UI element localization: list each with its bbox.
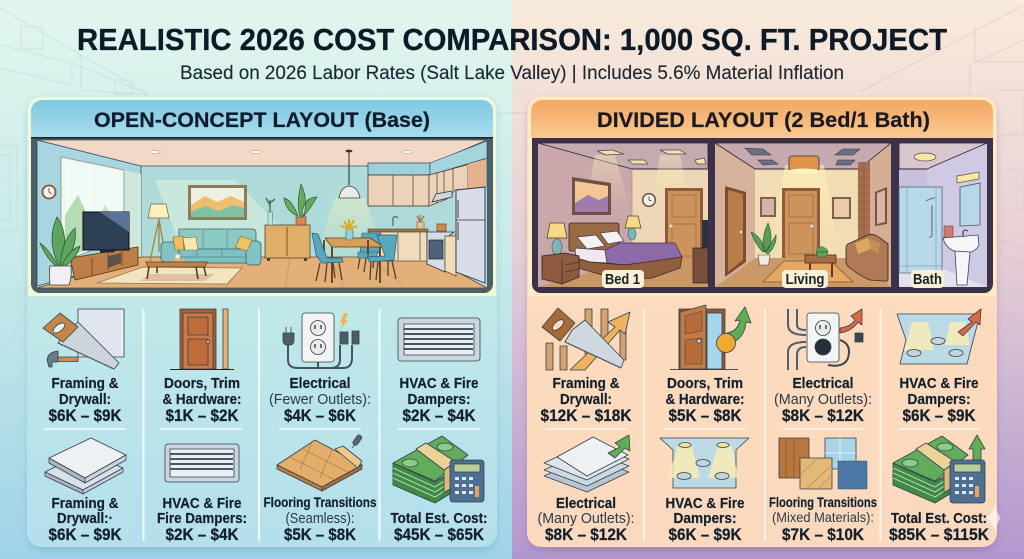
- living sofa: [846, 234, 888, 281]
- living plant: [751, 223, 776, 254]
- cost cell: framing and drywall: Drywall:: [59, 391, 111, 408]
- panel header: divided: DIVIDED LAYOUT (2 Bed/1 Bath): [597, 108, 930, 132]
- bed: [569, 223, 619, 251]
- icon: vent grille small: [165, 444, 239, 482]
- living pictures: [760, 197, 776, 217]
- cost cell: hvac and fire dampers, divided: Dampers:: [908, 391, 970, 408]
- living rug: [763, 261, 853, 282]
- cost cell: electrical many outlets: $8K – $12K: [782, 406, 865, 425]
- range hood: [432, 191, 452, 202]
- room: living: [715, 143, 891, 288]
- cost cell: doors, trim and hardware, divided: [666, 305, 751, 425]
- rug: [97, 267, 242, 284]
- cost cell: framing and drywall: [43, 309, 124, 425]
- cost cell: hvac and fire dampers, divided: HVAC & Fire: [900, 375, 978, 392]
- icon: money stack and calculator: [393, 436, 484, 503]
- sofa: [179, 229, 256, 250]
- bedroom clock: [642, 193, 656, 207]
- cost cell: electrical many outlets, second row: [538, 435, 634, 544]
- tv stand: [70, 247, 138, 280]
- icon: material swatches: [779, 438, 867, 489]
- cost cell: total estimated cost, open-concept: Total Est. Cost:: [390, 510, 488, 527]
- cost cell: flooring transitions mixed materials: Flooring Transitions: [769, 494, 877, 510]
- cost cell: framing and drywall: Framing &: [52, 375, 119, 392]
- illustration: open-concept living room and kitchen: [31, 137, 493, 293]
- cost cell: hvac and fire dampers, divided: [897, 309, 981, 425]
- cost cell: electrical many outlets, second row: $8K – $12K: [545, 525, 628, 544]
- cost cell: flooring transitions mixed materials: (Mixed Materials):: [772, 509, 874, 525]
- bedside lamps: [547, 223, 567, 238]
- wall picture: [188, 185, 247, 220]
- cost cell: total estimated cost, divided: [889, 435, 990, 544]
- background: left half: [0, 0, 512, 559]
- panel header: open-concept: OPEN-CONCEPT LAYOUT (Base): [94, 108, 430, 132]
- nightstand: [542, 253, 579, 284]
- cost cell: doors, trim and hardware: & Hardware:: [162, 391, 242, 408]
- cost cell: hvac and fire dampers, divided second row: [660, 438, 749, 544]
- cost cell: hvac and fire dampers, divided: $6K – $9K: [902, 406, 976, 425]
- icon: sparkle watermark: [985, 504, 1001, 532]
- sideboard: [265, 225, 310, 258]
- stove: [427, 232, 454, 272]
- left wall: [37, 140, 141, 286]
- living table: [805, 255, 836, 263]
- cost cell: framing and drywall, second row: Drywall:·: [57, 510, 113, 527]
- icon: saw, drywall and hammer: [43, 309, 124, 369]
- cost cell: total estimated cost, divided: Total Est. Cost:: [891, 510, 987, 527]
- panel header: divided: [528, 97, 996, 296]
- cost cell: hvac and fire dampers, divided second row: Dampers:: [674, 510, 736, 527]
- panel: divided layout: [527, 96, 997, 550]
- sink: [944, 226, 953, 240]
- cost cell: electrical many outlets: (Many Outlets):: [774, 391, 872, 408]
- icon: wood floor and roller: [277, 434, 363, 491]
- shower: [899, 187, 942, 273]
- dining table and chairs: [360, 233, 381, 253]
- cost cell: electrical fewer outlets: (Fewer Outlets):: [269, 391, 371, 408]
- cost cell: framing and drywall, divided: Framing &: [552, 375, 620, 392]
- icon: drywall sheets with green arrow: [544, 435, 630, 492]
- cost cell: framing and drywall, divided: [540, 308, 632, 425]
- cost cell: flooring transitions seamless: (Seamless):: [286, 510, 354, 527]
- cost cell: hvac and fire dampers, second row: [157, 444, 247, 544]
- cost cell: framing and drywall, second row: [45, 438, 126, 544]
- ceiling: [37, 140, 487, 166]
- label: bath: Bath: [913, 271, 942, 288]
- floor: [37, 257, 487, 288]
- icon: vent grille: [398, 318, 480, 361]
- label: living: Living: [786, 271, 824, 288]
- cost cell: electrical many outlets: Electrical: [792, 375, 854, 392]
- icon: saw, studs and arrow: [542, 308, 630, 370]
- icon: money stack, calculator and arrow: [893, 435, 985, 503]
- cost cell: hvac and fire dampers: $2K – $4K: [402, 406, 476, 425]
- room: bathroom: [899, 143, 987, 288]
- cost cell: hvac and fire dampers: HVAC & Fire: [400, 375, 478, 392]
- cost cell: electrical many outlets, second row: Electrical: [556, 495, 616, 512]
- bedroom wall picture: [572, 177, 611, 215]
- cost cell: total estimated cost, divided: $85K – $115K: [889, 525, 990, 544]
- cost cell: flooring transitions mixed materials: $7K – $10K: [782, 525, 865, 544]
- icon: outlet and plugs: [283, 313, 359, 368]
- living left door: [725, 186, 746, 277]
- title: REALISTIC 2026 COST COMPARISON: 1,000 SQ. FT. PROJECT: [77, 23, 947, 57]
- kitchen soffit and cabinets: [368, 163, 430, 175]
- window: [61, 157, 124, 262]
- icon: ceiling lights with red arrow: [897, 309, 981, 364]
- back wall: [37, 140, 487, 288]
- cost cell: hvac and fire dampers: Dampers:: [408, 391, 470, 408]
- wall clock: [42, 184, 56, 200]
- cost cell: framing and drywall, second row: Framing &: [52, 495, 119, 512]
- cost cell: doors, trim and hardware, divided: & Hardware:: [666, 391, 744, 408]
- illustration: divided rooms frame: [532, 138, 993, 293]
- living ceiling lamp and vents: [789, 156, 819, 171]
- cost cell: flooring transitions mixed materials: [769, 438, 877, 544]
- cost cell: doors, trim and hardware: [162, 309, 242, 425]
- mirror and light: [960, 183, 980, 226]
- living center door: [782, 188, 820, 258]
- cost cell: electrical many outlets, second row: (Many Outlets):: [538, 510, 634, 527]
- cost cell: hvac and fire dampers, divided second row: $6K – $9K: [668, 525, 742, 544]
- cost cell: doors, trim and hardware: $1K – $2K: [166, 406, 239, 425]
- cost cell: hvac and fire dampers, second row: Fire Dampers:: [157, 510, 247, 527]
- pendant light: [348, 151, 350, 185]
- icon: outlet, conduits and red arrow: [788, 309, 863, 370]
- cost cell: hvac and fire dampers, divided second row: HVAC & Fire: [666, 495, 744, 512]
- cost cell: electrical fewer outlets: $4K – $6K: [284, 406, 357, 425]
- icon: open door with arrow: [670, 305, 751, 370]
- cost cell: total estimated cost, open-concept: [390, 436, 488, 544]
- cost cell: total estimated cost, open-concept: $45K – $65K: [394, 525, 485, 544]
- lower cabinets: [368, 229, 428, 232]
- icon: stacked drywall sheets: [45, 438, 126, 494]
- cost cell: hvac and fire dampers, second row: $2K – $4K: [166, 525, 239, 544]
- icon: door and trim: [170, 309, 234, 370]
- cost cell: framing and drywall, second row: $6K – $9K: [48, 525, 122, 544]
- panel header: open-concept: [28, 97, 496, 296]
- cost cell: flooring transitions seamless: [264, 434, 377, 544]
- cost cell: doors, trim and hardware, divided: $5K – $8K: [668, 406, 742, 425]
- panel: open-concept layout: [27, 96, 497, 550]
- coffee table: [146, 262, 207, 267]
- potted plant left: [40, 217, 80, 268]
- floor lamp: [150, 219, 166, 261]
- cost cell: framing and drywall: $6K – $9K: [48, 406, 122, 425]
- cost cell: hvac and fire dampers, second row: HVAC & Fire: [162, 495, 242, 512]
- icon: ceiling with recessed lights: [660, 438, 749, 488]
- plant on sideboard: [284, 184, 317, 216]
- cost cell: framing and drywall, divided: Drywall:: [560, 391, 612, 408]
- cost cell: flooring transitions seamless: Flooring Transitions: [264, 494, 377, 510]
- cost cell: doors, trim and hardware: Doors, Trim: [164, 375, 240, 392]
- bedroom door: [665, 188, 703, 260]
- subtitle: Based on 2026 Labor Rates (Salt Lake Valley) | Includes 5.6% Material Inflation: [180, 62, 844, 84]
- label: bed 1: Bed 1: [605, 271, 640, 288]
- kitchen backsplash items: [393, 217, 398, 226]
- cost cell: electrical fewer outlets: Electrical: [290, 375, 350, 392]
- cost cell: doors, trim and hardware, divided: Doors, Trim: [667, 375, 743, 392]
- refrigerator: [456, 187, 485, 283]
- cost cell: electrical fewer outlets: [269, 313, 371, 425]
- brick strip: [858, 162, 870, 240]
- cost cell: framing and drywall, divided: $12K – $18K: [540, 406, 632, 425]
- television: [83, 212, 129, 250]
- cost cell: electrical many outlets: [774, 309, 872, 425]
- bedroom dresser: [693, 248, 708, 283]
- cost cell: flooring transitions seamless: $5K – $8K: [284, 525, 357, 544]
- cost cell: hvac and fire dampers: [398, 318, 480, 425]
- room: bedroom: [538, 143, 708, 288]
- background: right half: [512, 0, 1024, 559]
